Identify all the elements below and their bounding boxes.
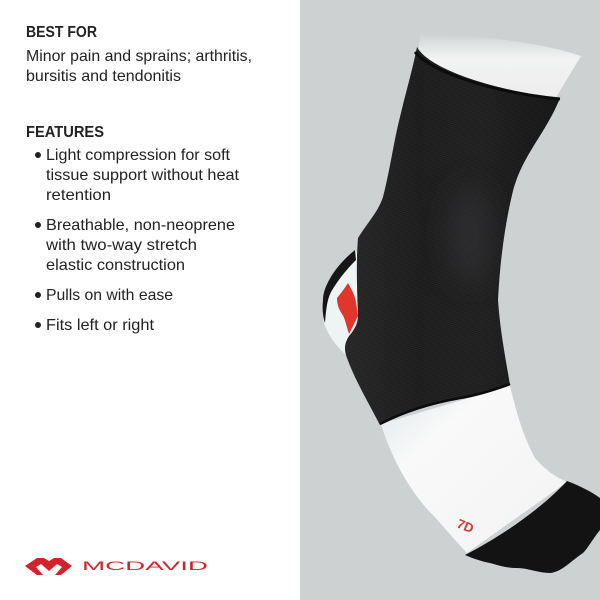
feature: light compression: tissue support without heat [46,167,240,184]
feature: breathable: Breathable, non-neoprene [46,217,235,234]
black sleeve [345,47,560,425]
heading: best for: BEST FOR [26,24,97,41]
upper leg fabric [418,34,581,104]
panel: product photo of ankle sleeve [323,34,600,573]
red logo on foot: 7D [455,516,476,536]
feature: fits left or right: Fits left or right [46,317,155,334]
icon: M mark [25,558,72,575]
feature list [35,147,240,334]
black toe [465,481,600,573]
feature: pulls on: Pulls on with ease [46,287,173,304]
feature: breathable [35,217,235,274]
heading: features: FEATURES [26,124,104,141]
panel: photo background [300,0,600,600]
feature: light compression: retention [46,187,111,204]
wordmark: MCDAVID [82,559,209,573]
heel with graphic [323,250,366,356]
feature: light compression: Light compression for soft [46,147,231,164]
white foot fabric [381,386,567,553]
logo: McDavid [25,558,209,575]
feature: light compression [35,147,240,204]
text block: best for description [26,48,252,85]
feature: breathable: elastic construction [46,257,185,274]
text block: best for description: Minor pain and sprains; arthritis, [26,48,252,65]
feature: breathable: with two-way stretch [45,237,197,254]
text block: best for description: bursitis and tendonitis [26,68,181,85]
